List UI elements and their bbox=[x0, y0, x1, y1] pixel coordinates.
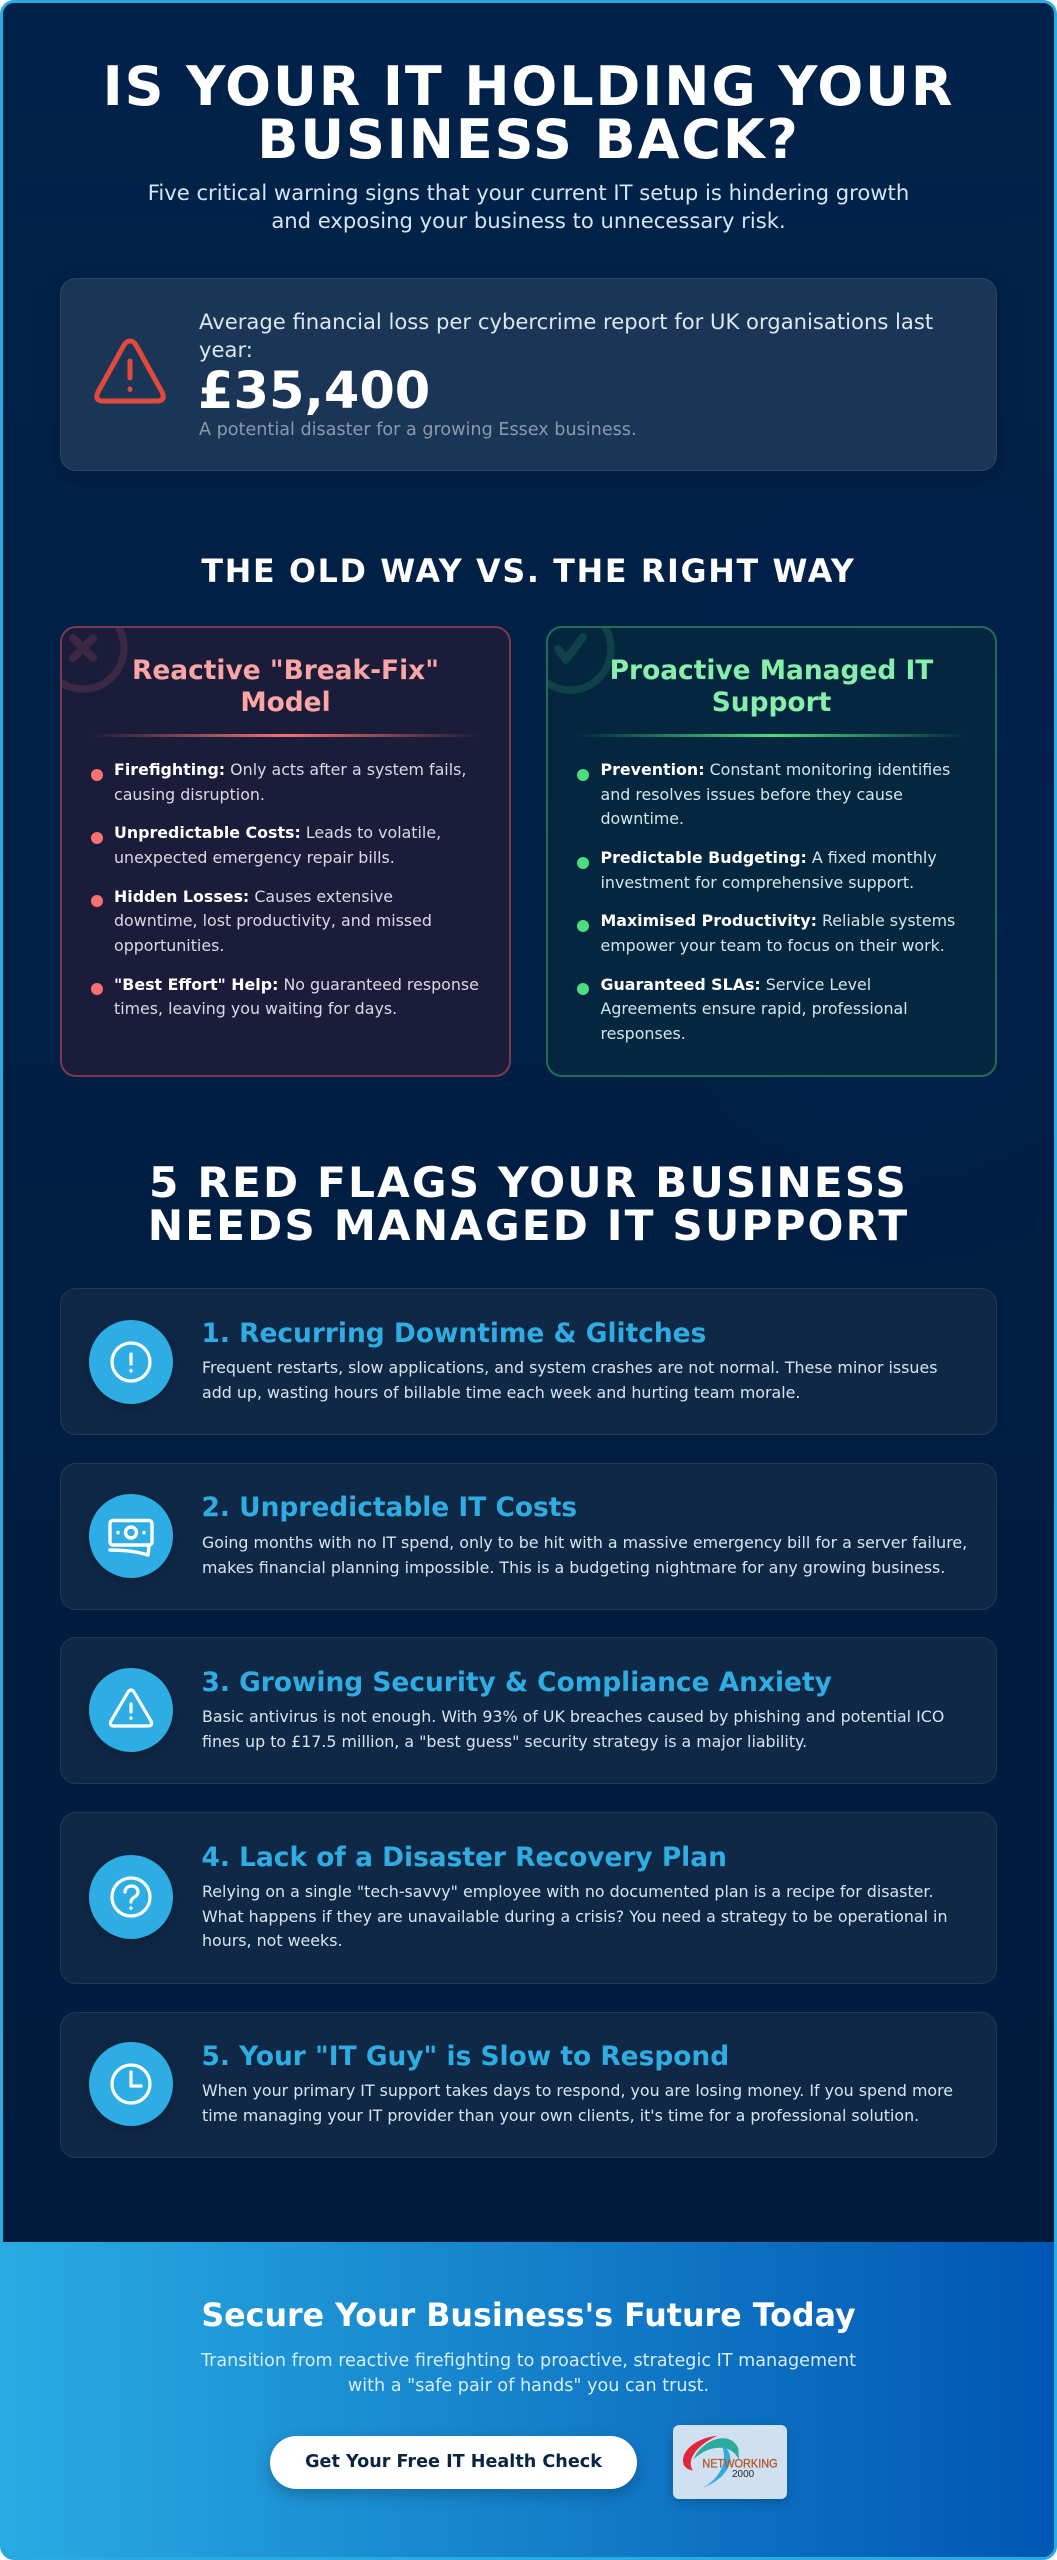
bullet: prevention: downtime. bbox=[600, 809, 684, 828]
icon: warning triangle bbox=[89, 1668, 173, 1752]
bullet: prevention: and resolves issues before they cause bbox=[600, 785, 903, 804]
heading: five red flags: 5 RED FLAGS YOUR BUSINESS bbox=[149, 1158, 908, 1207]
flag 4 description: What happens if they are unavailable during a crisis? You need a strategy to be operational in bbox=[202, 1907, 948, 1926]
divider bbox=[576, 734, 967, 737]
flag 3 title: 3. Growing Security & Compliance Anxiety bbox=[202, 1666, 832, 1698]
bullet: unpredictable costs bbox=[114, 823, 441, 867]
CTA text bbox=[200, 2350, 856, 2396]
logo: Networking 2000: NETWORKING bbox=[702, 2456, 778, 2470]
icon: check circle watermark bbox=[548, 628, 615, 694]
stat value: £35,400 bbox=[198, 362, 430, 421]
heading: proactive model bbox=[610, 655, 934, 718]
flag 4 description: hours, not weeks. bbox=[202, 1931, 343, 1950]
stat lead text: year: bbox=[199, 337, 253, 362]
bullet: unpredictable costs: unexpected emergency repair bills. bbox=[114, 848, 395, 867]
subtitle: Five critical warning signs that your current IT setup is hindering growth bbox=[148, 180, 909, 204]
flag 1 description bbox=[202, 1358, 937, 1402]
bullet: maximised productivity: empower your team to focus on their work. bbox=[600, 936, 945, 955]
flag 1 description: Frequent restarts, slow applications, and system crashes are not normal. These minor issues bbox=[202, 1358, 937, 1377]
CTA button: Get Your Free IT Health Check bbox=[305, 2452, 602, 2472]
logo: Networking 2000: 2000 bbox=[732, 2469, 755, 2480]
divider bbox=[90, 734, 481, 737]
heading: five red flags bbox=[148, 1158, 909, 1250]
icon: warning triangle bbox=[94, 338, 166, 404]
bullet dot bbox=[91, 769, 103, 781]
flag 2 description: Going months with no IT spend, only to be hit with a massive emergency bill for a server failure, bbox=[202, 1533, 967, 1552]
bullet: predictable budgeting: Predictable Budgeting: A fixed monthly bbox=[600, 848, 937, 867]
logo: Networking 2000 bbox=[673, 2425, 787, 2499]
bullet: unpredictable costs: Unpredictable Costs: Leads to volatile, bbox=[114, 823, 441, 842]
CTA button bbox=[270, 2436, 637, 2489]
bullet: guaranteed SLAs: Agreements ensure rapid, professional bbox=[600, 999, 908, 1018]
title: IS YOUR IT HOLDING YOUR bbox=[103, 55, 954, 118]
bullet dot bbox=[91, 895, 103, 907]
bullet dot bbox=[577, 983, 589, 995]
bullet dot bbox=[577, 920, 589, 932]
subtitle: and exposing your business to unnecessary risk. bbox=[271, 208, 786, 233]
flag 4 description: Relying on a single "tech-savvy" employee with no documented plan is a recipe for disaster. bbox=[202, 1882, 934, 1901]
icon: clock bbox=[89, 2042, 173, 2126]
panel: flag 3 bbox=[60, 1637, 997, 1784]
icon: exclamation circle bbox=[89, 1320, 173, 1404]
heading: old way vs right way: THE OLD WAY VS. THE RIGHT WAY bbox=[201, 554, 856, 590]
panel: flag 4 bbox=[60, 1812, 997, 1984]
heading: proactive model: Support bbox=[712, 687, 831, 718]
bullet: firefighting bbox=[114, 760, 466, 804]
stat note: A potential disaster for a growing Essex business. bbox=[199, 420, 637, 440]
panel: flag 1 bbox=[60, 1288, 997, 1435]
flag 1 description: add up, wasting hours of billable time each week and hurting team morale. bbox=[202, 1383, 800, 1402]
panel: reactive break-fix bbox=[60, 626, 511, 1077]
flag 1 title: 1. Recurring Downtime & Glitches bbox=[202, 1318, 706, 1348]
flag 2 title: 2. Unpredictable IT Costs bbox=[202, 1492, 577, 1522]
flag 5 description: time managing your IT provider than your own clients, it's time for a professional solution. bbox=[202, 2106, 919, 2125]
bullet: firefighting: Firefighting: Only acts after a system fails, bbox=[114, 760, 466, 779]
bullet: hidden losses: Hidden Losses: Causes extensive bbox=[114, 886, 393, 906]
stat lead text: Average financial loss per cybercrime report for UK organisations last bbox=[199, 309, 933, 334]
bullet: guaranteed SLAs bbox=[600, 974, 908, 1043]
bullet: predictable budgeting: investment for comprehensive support. bbox=[600, 873, 914, 892]
heading: proactive model: Proactive Managed IT bbox=[610, 655, 933, 686]
bullet: guaranteed SLAs: responses. bbox=[600, 1024, 686, 1043]
bullet: hidden losses: opportunities. bbox=[114, 936, 224, 955]
panel: financial loss stat bbox=[60, 278, 997, 471]
stat lead text bbox=[199, 309, 933, 362]
CTA heading: Secure Your Business's Future Today bbox=[201, 2298, 856, 2334]
bullet: maximised productivity: Maximised Productivity: Reliable systems bbox=[600, 911, 955, 930]
flag 5 description: When your primary IT support takes days to respond, you are losing money. If you spend more bbox=[202, 2081, 953, 2100]
bullet: best effort: "Best Effort" Help: No guaranteed response bbox=[114, 974, 479, 994]
icon: question circle bbox=[89, 1855, 173, 1939]
CTA text: Transition from reactive firefighting to proactive, strategic IT management bbox=[201, 2350, 856, 2370]
bullet: best effort: times, leaving you waiting for days. bbox=[114, 999, 397, 1018]
heading: reactive model: Reactive "Break-Fix" bbox=[132, 655, 439, 686]
heading: five red flags: NEEDS MANAGED IT SUPPORT bbox=[148, 1201, 909, 1250]
icon: banknotes bbox=[89, 1494, 173, 1578]
bullet: maximised productivity bbox=[600, 911, 955, 955]
flag 3 description: fines up to £17.5 million, a "best guess" security strategy is a major liability. bbox=[202, 1732, 807, 1751]
heading: reactive model: Model bbox=[240, 687, 331, 718]
title bbox=[103, 55, 954, 171]
bullet: hidden losses bbox=[114, 886, 432, 955]
flag 4 title: 4. Lack of a Disaster Recovery Plan bbox=[202, 1842, 727, 1872]
bullet: hidden losses: downtime, lost productivity, and missed bbox=[114, 911, 432, 930]
bullet: predictable budgeting bbox=[600, 848, 937, 892]
icon: x circle watermark bbox=[62, 628, 128, 693]
heading: reactive model bbox=[132, 655, 439, 718]
bullet: guaranteed SLAs: Guaranteed SLAs: Service Level bbox=[600, 974, 871, 994]
flag 5 title: 5. Your "IT Guy" is Slow to Respond bbox=[202, 2040, 729, 2072]
flag 5 description bbox=[202, 2081, 953, 2125]
CTA text: with a "safe pair of hands" you can trust. bbox=[348, 2376, 709, 2396]
bullet dot bbox=[577, 769, 589, 781]
bullet dot bbox=[577, 857, 589, 869]
flag 3 description bbox=[202, 1707, 944, 1751]
panel: flag 2 bbox=[60, 1463, 997, 1610]
panel: proactive managed IT bbox=[546, 626, 997, 1077]
bullet dot bbox=[91, 832, 103, 844]
flag 3 description: Basic antivirus is not enough. With 93% of UK breaches caused by phishing and potential ICO bbox=[202, 1707, 944, 1726]
title: BUSINESS BACK? bbox=[257, 108, 800, 171]
flag 2 description bbox=[202, 1533, 967, 1577]
bullet: prevention: Prevention: Constant monitoring identifies bbox=[600, 760, 950, 779]
flag 2 description: makes financial planning impossible. This is a budgeting nightmare for any growing business. bbox=[202, 1558, 945, 1577]
bullet dot bbox=[91, 983, 103, 995]
panel: call to action bbox=[0, 2242, 1057, 2560]
bullet: firefighting: causing disruption. bbox=[114, 785, 265, 804]
flag 4 description bbox=[202, 1882, 948, 1950]
bullet: prevention bbox=[600, 760, 950, 828]
bullet: best effort bbox=[114, 974, 479, 1018]
subtitle bbox=[148, 180, 909, 233]
panel: flag 5 bbox=[60, 2012, 997, 2158]
